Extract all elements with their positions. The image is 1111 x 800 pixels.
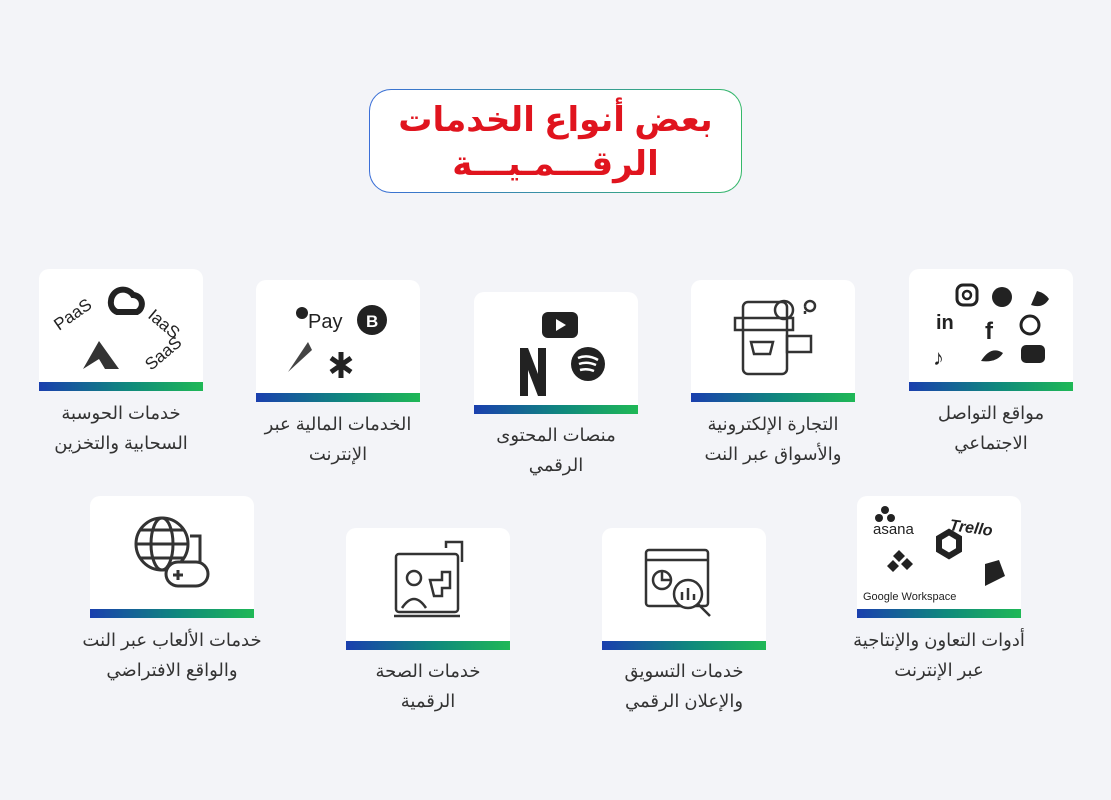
title: بعض أنواع الخدمات (398, 101, 713, 139)
card: fintech: Pay (308, 311, 342, 333)
card: cloud computing (39, 269, 203, 391)
label: health (375, 661, 480, 712)
label: gaming (82, 628, 262, 680)
label: cloud: خدمات الحوسبة (61, 403, 181, 423)
card: fintech (256, 280, 420, 402)
title: الرقـــمـيـــة (452, 145, 659, 183)
title (369, 89, 742, 193)
label: collaboration: أدوات التعاون والإنتاجية (853, 630, 1025, 650)
card: collaboration tools: Google Workspace (863, 591, 956, 603)
label: cloud: السحابية والتخزين (54, 433, 188, 453)
card: social media: f (985, 318, 994, 345)
card: collaboration tools: asana (873, 521, 915, 538)
card: cloud computing: SaaS (141, 333, 185, 374)
label: health: الرقمية (401, 691, 455, 711)
label: social: مواقع التواصل (938, 403, 1044, 423)
label: social (938, 403, 1044, 454)
label: e-commerce: التجارة الإلكترونية (708, 414, 838, 434)
card: social media: ♪ (933, 345, 944, 370)
label: gaming: خدمات الألعاب عبر النت (82, 630, 262, 650)
card: content platforms (474, 292, 638, 414)
label: fintech (264, 414, 411, 464)
label: marketing: والإعلان الرقمي (625, 691, 743, 711)
label: fintech: الإنترنت (309, 444, 367, 464)
label: marketing (625, 661, 743, 712)
label: e-commerce: والأسواق عبر النت (704, 444, 842, 464)
label: collaboration (853, 628, 1025, 680)
card: cloud computing: IaaS (144, 306, 183, 343)
label: gaming: والواقع الافتراضي (106, 660, 238, 680)
card: collaboration tools (857, 496, 1021, 618)
card: collaboration tools: Trello (948, 517, 994, 540)
label: collaboration: عبر الإنترنت (894, 660, 984, 680)
label: fintech: الخدمات المالية عبر (265, 414, 411, 434)
card: gaming VR (90, 496, 254, 618)
card: social media: in (936, 312, 954, 334)
card: cloud computing: PaaS (50, 295, 95, 334)
card: fintech: B (366, 312, 378, 331)
label: social: الاجتماعي (954, 433, 1028, 453)
card: marketing (602, 528, 766, 650)
card: e-commerce (691, 280, 855, 402)
card: digital health (346, 528, 510, 650)
label: cloud (54, 403, 188, 454)
label: marketing: خدمات التسويق (625, 661, 743, 681)
label: e-commerce (704, 414, 842, 464)
card: social media (909, 269, 1073, 391)
label: content: الرقمي (529, 455, 583, 475)
label: health: خدمات الصحة (375, 661, 480, 681)
label: content (496, 425, 616, 476)
label: content: منصات المحتوى (496, 425, 616, 445)
